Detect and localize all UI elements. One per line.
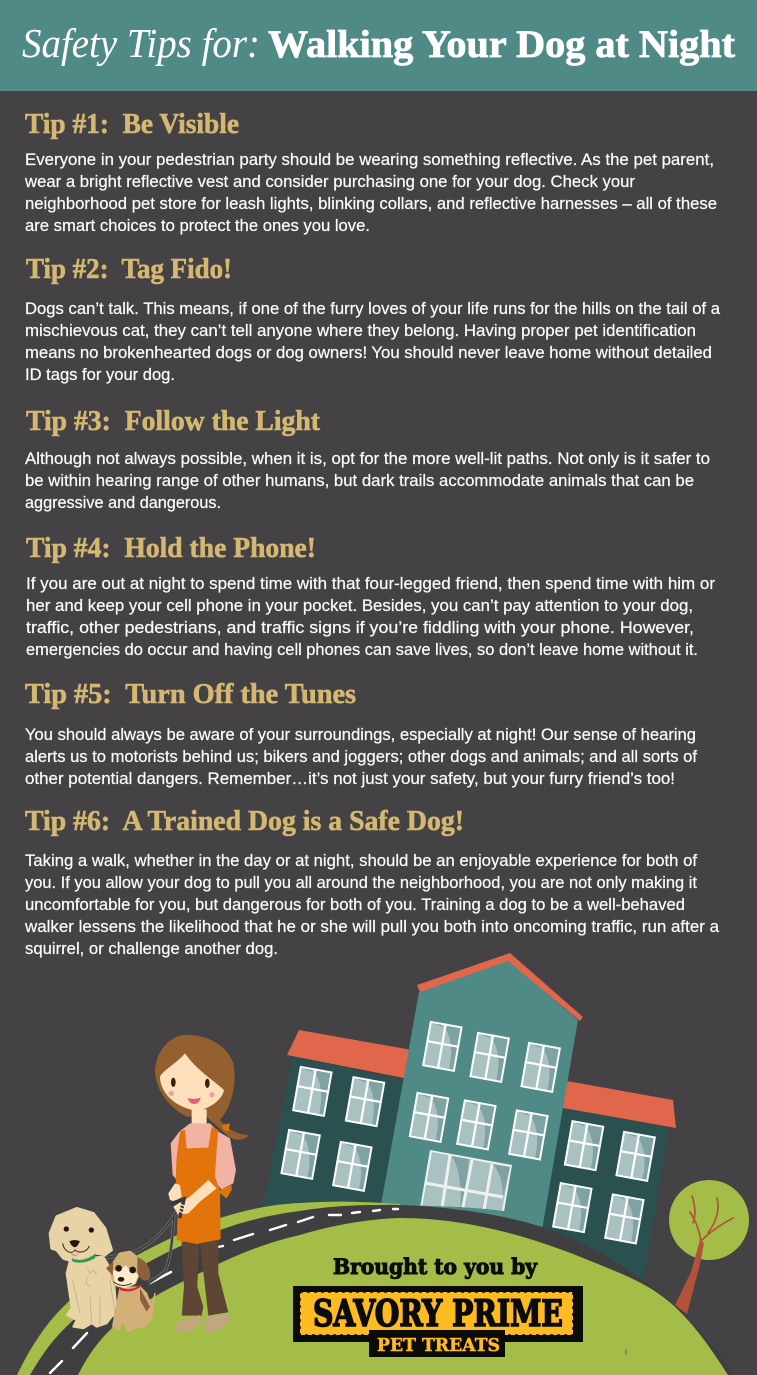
tip 5: Tip #5: Turn Off the Tunes — [25, 679, 356, 710]
logo: PET TREATS — [377, 1335, 500, 1356]
pink shirt and sleeves — [171, 1123, 236, 1189]
tip 2: means no brokenhearted dogs or dog owners! You should never leave home without detailed — [25, 344, 712, 362]
tip 6: uncomfortable for you, but dangerous for both of you. Training a dog to be a well-behaved — [25, 896, 685, 914]
door — [420, 1150, 512, 1211]
small dog — [106, 1252, 155, 1332]
body — [67, 1257, 117, 1328]
tip 3 — [25, 406, 710, 512]
title: Safety Tips for: — [22, 20, 260, 66]
tip 5: other potential dangers. Remember…it’s not just your safety, but your furry friend’s too! — [25, 770, 675, 788]
logo — [293, 1286, 583, 1357]
body — [113, 1287, 155, 1332]
fingers — [176, 1204, 188, 1213]
tip 4: Tip #4: Hold the Phone! — [26, 533, 316, 564]
tip 4: emergencies do occur and having cell phones can save lives, so don’t leave home without it. — [26, 641, 698, 659]
inner green hill — [78, 1218, 728, 1375]
tip 2 — [25, 254, 721, 384]
tip 3: Tip #3: Follow the Light — [26, 406, 321, 437]
tip 5: You should always be aware of your surroundings, especially at night! Our sense of hearing — [25, 726, 696, 744]
left wing — [262, 1030, 420, 1212]
tip 5 — [25, 679, 697, 788]
leashes — [103, 1212, 177, 1283]
tip 5: alerts us to motorists behind us; bikers and joggers; other dogs and animals; and all sorts of — [25, 748, 697, 766]
hair — [155, 1035, 249, 1140]
tip 6: Tip #6: A Trained Dog is a Safe Dog! — [25, 806, 464, 837]
tip 4: If you are out at night to spend time with that four-legged friend, then spend time with him or — [26, 575, 716, 593]
tip 6: you. If you allow your dog to pull you all around the neighborhood, you are not only making it — [25, 874, 697, 892]
tip 6 — [24, 806, 720, 958]
tip 3: be within hearing range of other humans, but dark trails accommodate animals that can be — [25, 472, 694, 490]
tip 1: Tip #1: Be Visible — [25, 109, 239, 140]
tip 1: neighborhood pet store for leash lights, blinking collars, and reflective harnesses – all of these — [25, 195, 717, 213]
tree — [669, 1180, 749, 1314]
leash handle — [171, 1199, 184, 1217]
road — [30, 1205, 735, 1375]
tip 1 — [24, 109, 717, 235]
green collar — [72, 1253, 96, 1263]
outer green strip — [17, 1202, 400, 1375]
shoes — [177, 1313, 229, 1333]
tip 4 — [26, 533, 716, 659]
face — [160, 1053, 224, 1111]
tip 1: Everyone in your pedestrian party should be wearing something reflective. As the pet parent, — [25, 151, 714, 169]
tip 1: wear a bright reflective vest and consider purchasing one for your dog. Check your — [24, 173, 636, 191]
legs — [182, 1238, 228, 1316]
header band — [0, 0, 757, 91]
sponsor — [293, 1254, 583, 1357]
apron bow — [220, 1185, 232, 1198]
neck — [192, 1108, 207, 1124]
tip 6: squirrel, or challenge another dog. — [25, 940, 278, 958]
face — [113, 1265, 136, 1285]
face — [63, 1226, 94, 1256]
head — [112, 1252, 140, 1288]
title — [22, 20, 735, 66]
logo: SAVORY PRIME — [313, 1293, 563, 1335]
title: Walking Your Dog at Night — [268, 23, 735, 66]
arms and hands — [168, 1180, 217, 1215]
ears — [106, 1257, 150, 1281]
tip 2: ID tags for your dog. — [25, 366, 175, 384]
facial features — [169, 1078, 215, 1104]
brought to you by: Brought to you by — [333, 1254, 538, 1279]
buildings — [262, 953, 676, 1285]
hill and road — [17, 1202, 735, 1375]
big dog — [50, 1208, 117, 1328]
tip 2: mischievous cat, they can’t tell anyone where they belong. Having proper pet identification — [25, 322, 696, 340]
muzzle — [113, 1265, 140, 1288]
tip 6: Taking a walk, whether in the day or at night, should be an enjoyable experience for both of — [25, 852, 697, 870]
tip 2: Tip #2: Tag Fido! — [26, 254, 232, 285]
tip 6: walker lessens the likelihood that he or she will pull you both into oncoming traffic, run after a — [24, 918, 720, 936]
tip 4: her and keep your cell phone in your pocket. Besides, you can’t pay attention to your dog, — [26, 597, 693, 615]
tip 3: Although not always possible, when it is, opt for the more well-lit paths. Not only is it safer to — [25, 450, 710, 468]
fur and leg lines — [73, 1268, 115, 1325]
road dashes — [50, 1209, 398, 1373]
right wing — [535, 1081, 676, 1285]
hair tie — [222, 1123, 230, 1132]
tip 2: Dogs can’t talk. This means, if one of the furry loves of your life runs for the hills on the tail of a — [25, 300, 721, 318]
centre block — [381, 953, 583, 1235]
tip 3: aggressive and dangerous. — [25, 494, 221, 512]
back patch — [140, 1288, 150, 1312]
head — [50, 1208, 112, 1262]
tip 1: are smart choices to protect the ones you love. — [25, 217, 370, 235]
red collar — [119, 1284, 141, 1291]
woman — [155, 1035, 249, 1333]
orange apron — [176, 1127, 221, 1244]
tip 4: traffic, other pedestrians, and traffic signs if you’re fiddling with your phone. However, — [26, 619, 694, 637]
